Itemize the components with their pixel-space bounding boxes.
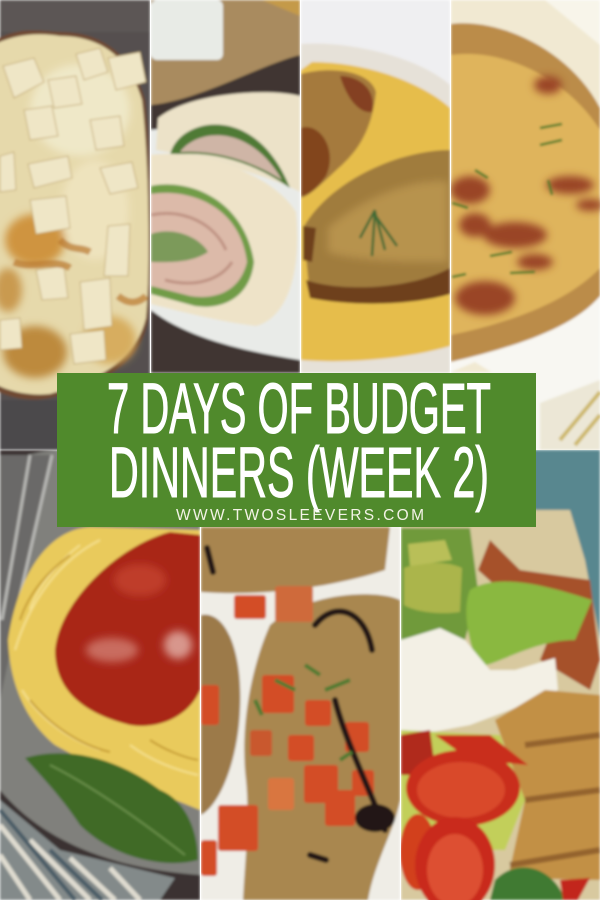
website url: WWW.TWOSLEEVERS.COM: [176, 507, 424, 524]
title banner: [57, 370, 536, 527]
striped napkin: [0, 800, 175, 900]
title: [107, 370, 491, 513]
lower wrap: [151, 154, 297, 326]
panel: creamy pork chops: [301, 0, 450, 373]
panel: chicken pizza: [0, 0, 151, 450]
bacon: [478, 540, 600, 690]
upper wrap: [156, 92, 300, 192]
upper chop: [301, 70, 376, 198]
panel: spaghetti squash marinara: [0, 450, 200, 900]
tomatoes: [400, 730, 528, 900]
lower chop: [303, 150, 450, 303]
panel: bacon quiche: [450, 0, 600, 450]
panel: balsamic bruschetta chicken: [201, 527, 400, 900]
lower lettuce: [401, 730, 525, 850]
panel: turkey pinwheel wraps: [151, 0, 300, 373]
chicken: [495, 690, 600, 880]
herb: [360, 210, 397, 256]
feta: [401, 628, 558, 738]
lettuce: [466, 581, 592, 666]
panel: chicken bacon salad: [400, 450, 600, 900]
